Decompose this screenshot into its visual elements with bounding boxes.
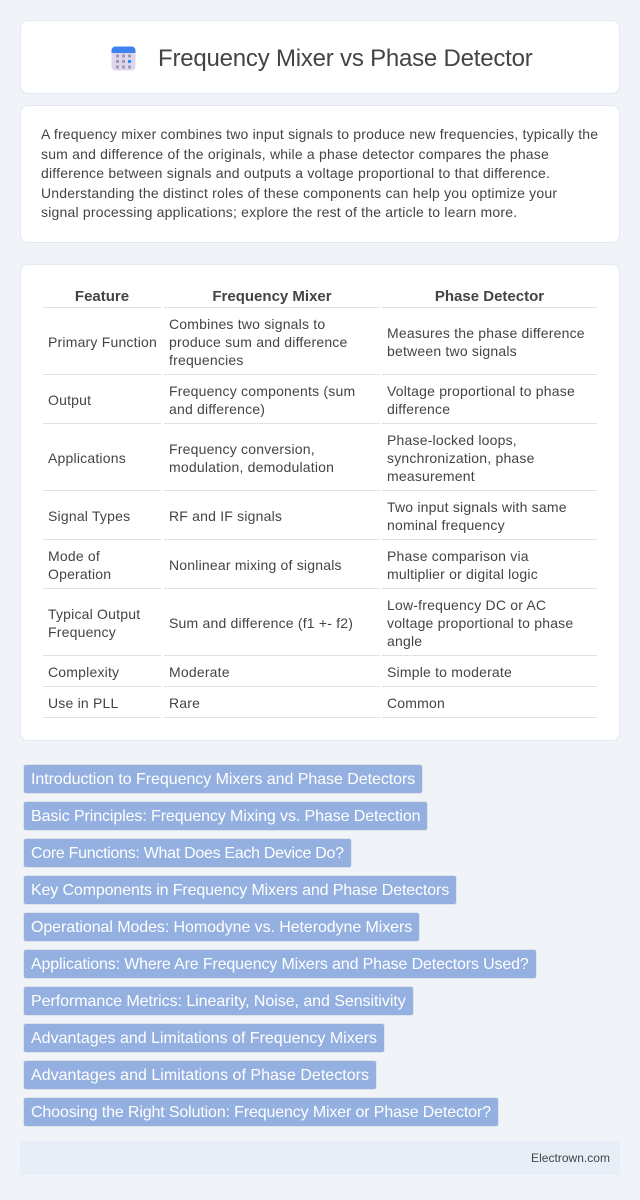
row: applications: measurement <box>387 468 475 484</box>
row: complexity: Simple to moderate <box>387 664 512 680</box>
row: use in pll: Use in PLL <box>48 694 118 710</box>
row: applications: modulation, demodulation <box>169 458 334 474</box>
row: signal types: RF and IF signals <box>169 508 282 524</box>
tag 2: Basic Principles: Frequency Mixing vs. Phase Detection <box>31 808 420 825</box>
row: signal types <box>43 498 597 540</box>
tag 3 <box>23 838 352 868</box>
intro paragraph: difference between signals and outputs a voltage proportional to that difference. <box>41 165 550 181</box>
row: signal types: nominal frequency <box>387 516 505 532</box>
table header row: Frequency Mixer <box>212 288 332 304</box>
row: primary function: Primary Function <box>48 334 157 350</box>
table header row: Phase Detector <box>435 288 544 304</box>
intro paragraph: sum and difference of the originals, while a phase detector compares the phase <box>41 146 549 162</box>
tag 4 <box>23 875 457 905</box>
tag 5 <box>23 912 420 942</box>
row: complexity: Complexity <box>48 664 119 680</box>
row: typical output frequency: angle <box>387 632 422 648</box>
tag 10: Choosing the Right Solution: Frequency Mixer or Phase Detector? <box>31 1104 491 1121</box>
row: primary function: between two signals <box>387 342 517 358</box>
footer bar <box>20 1141 620 1175</box>
row: signal types: Signal Types <box>48 508 130 524</box>
row: primary function: frequencies <box>169 352 244 368</box>
tag 9: Advantages and Limitations of Phase Detectors <box>31 1067 369 1084</box>
tag 10 <box>23 1097 499 1127</box>
icon: calendar <box>112 46 136 70</box>
row: primary function: Measures the phase difference <box>387 324 585 340</box>
title: Frequency Mixer vs Phase Detector <box>158 45 533 72</box>
row: applications <box>43 432 597 491</box>
intro paragraph: A frequency mixer combines two input signals to produce new frequencies, typically the <box>41 126 598 142</box>
tag 1 <box>23 764 423 794</box>
row: primary function: Combines two signals to <box>169 316 325 332</box>
row: typical output frequency <box>43 596 597 656</box>
row: applications: synchronization, phase <box>387 450 535 466</box>
row: complexity: Moderate <box>169 664 230 680</box>
tag 3: Core Functions: What Does Each Device Do? <box>31 845 344 862</box>
row: typical output frequency: Typical Output <box>48 606 140 622</box>
row: typical output frequency: Frequency <box>48 624 116 640</box>
table header row <box>43 288 597 308</box>
row: output <box>43 382 597 424</box>
footer source text: Electrown.com <box>531 1151 610 1165</box>
row: mode of operation: Operation <box>48 566 111 582</box>
row: applications: Phase-locked loops, <box>387 432 517 448</box>
tag 7 <box>23 986 414 1016</box>
header card <box>20 20 620 94</box>
row: mode of operation: multiplier or digital logic <box>387 566 538 582</box>
row: output: Frequency components (sum <box>169 382 355 398</box>
tag 8: Advantages and Limitations of Frequency Mixers <box>31 1030 377 1047</box>
tag 7: Performance Metrics: Linearity, Noise, and Sensitivity <box>31 993 406 1010</box>
table header row: Feature <box>75 288 129 304</box>
intro paragraph <box>41 126 598 220</box>
row: typical output frequency: voltage proportional to phase <box>387 614 573 630</box>
intro paragraph: signal processing applications; explore the rest of the article to learn more. <box>41 204 517 220</box>
row: applications: Applications <box>48 450 126 466</box>
row: output: Output <box>48 392 91 408</box>
tag 2 <box>23 801 428 831</box>
row: signal types: Two input signals with same <box>387 498 567 514</box>
row: use in pll <box>43 694 597 718</box>
row: output: Voltage proportional to phase <box>387 382 575 398</box>
row: mode of operation: Nonlinear mixing of signals <box>169 556 342 572</box>
row: use in pll: Common <box>387 694 445 710</box>
link tags list <box>23 764 537 1127</box>
row: mode of operation <box>43 548 597 589</box>
tag 9 <box>23 1060 377 1090</box>
tag 6: Applications: Where Are Frequency Mixers and Phase Detectors Used? <box>31 956 529 973</box>
row: output: and difference) <box>169 400 265 416</box>
row: applications: Frequency conversion, <box>169 440 315 456</box>
row: mode of operation: Mode of <box>48 548 100 564</box>
intro paragraph: Understanding the distinct roles of these components can help you optimize your <box>41 185 557 201</box>
tag 4: Key Components in Frequency Mixers and Phase Detectors <box>31 882 449 899</box>
row: use in pll: Rare <box>169 694 200 710</box>
row: complexity <box>43 664 597 687</box>
intro text card <box>20 105 620 243</box>
tag 1: Introduction to Frequency Mixers and Phase Detectors <box>31 771 415 788</box>
row: typical output frequency: Low-frequency DC or AC <box>387 596 546 612</box>
row: primary function <box>43 316 597 375</box>
comparison table card <box>20 264 620 741</box>
tag 6 <box>23 949 537 979</box>
row: primary function: produce sum and difference <box>169 334 348 350</box>
row: output: difference <box>387 400 450 416</box>
tag 8 <box>23 1023 385 1053</box>
row: mode of operation: Phase comparison via <box>387 548 529 564</box>
tag 5: Operational Modes: Homodyne vs. Heterodyne Mixers <box>31 919 412 936</box>
row: typical output frequency: Sum and difference (f1 +- f2) <box>169 614 353 630</box>
